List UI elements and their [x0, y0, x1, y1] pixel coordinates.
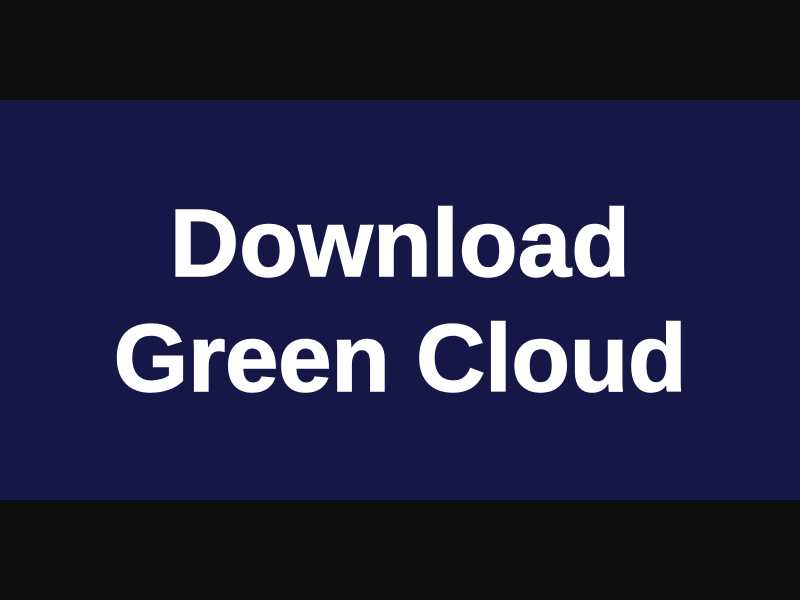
title line 2: Green Cloud	[114, 305, 686, 412]
title line 1: Download	[170, 190, 630, 297]
title: download green cloud	[114, 190, 686, 412]
panel: navy banner	[0, 100, 800, 500]
